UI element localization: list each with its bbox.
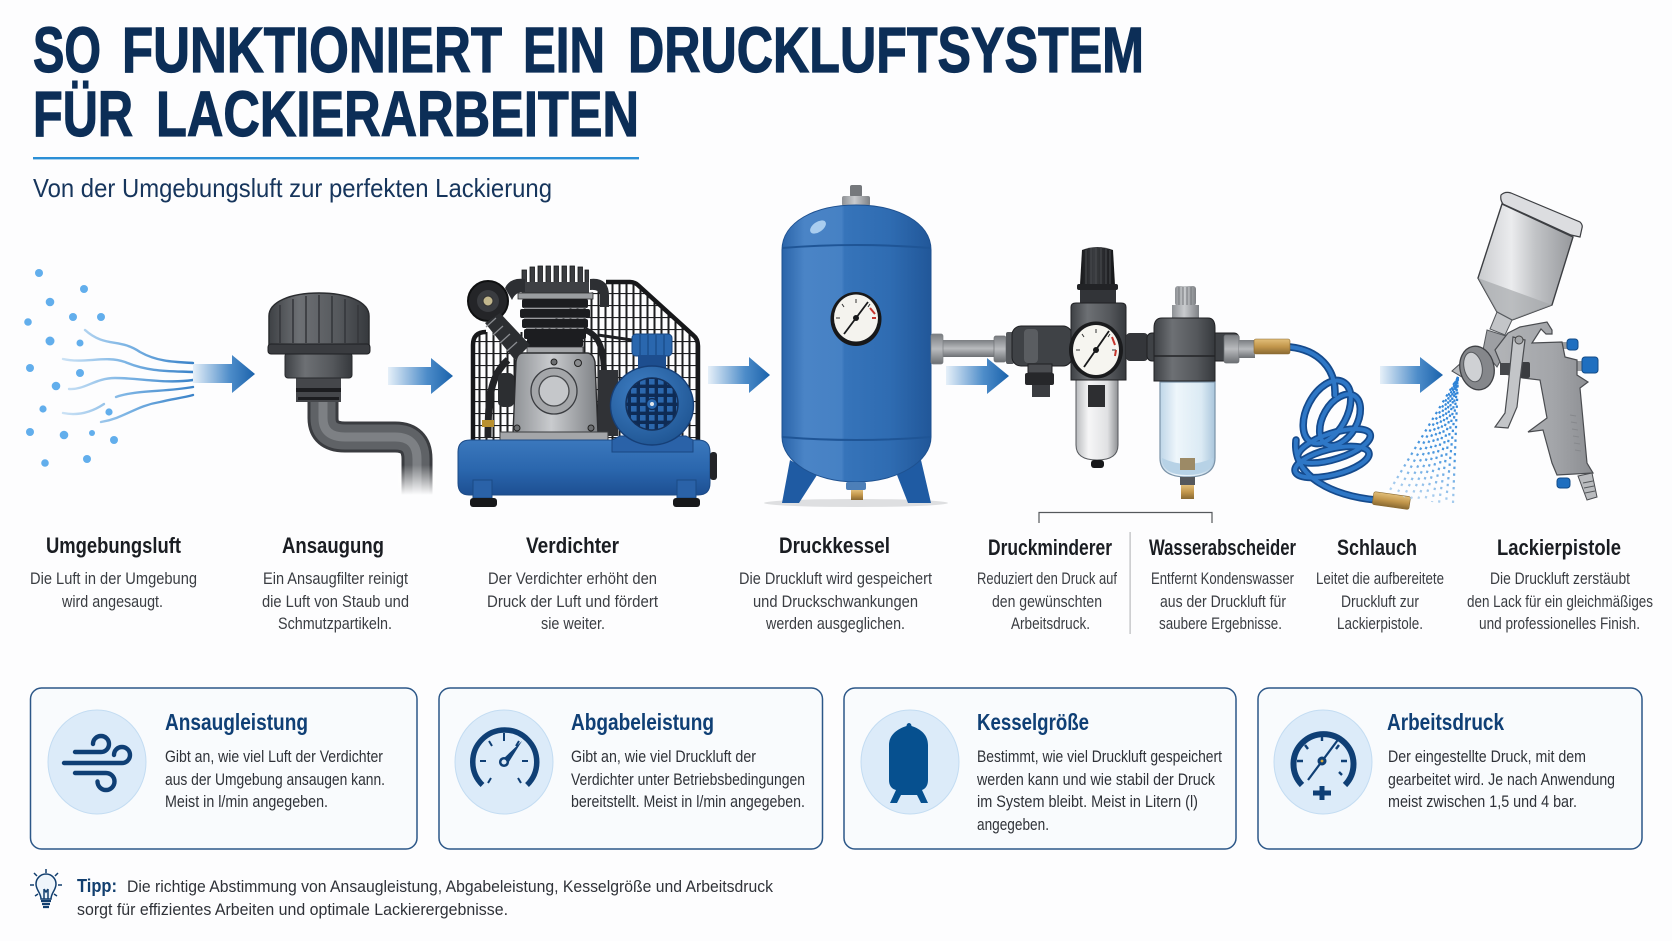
arrow 2 [388,358,453,394]
step: Ansaugung: die Luft von Staub und [262,593,409,611]
step: Wasserabscheider: Wasserabscheider [1149,535,1296,560]
panel: Ansaugleistung [30,688,417,849]
step: Ansaugung [262,533,409,633]
step: Druckkessel: Die Druckluft wird gespeichert [739,570,932,588]
step: Druckminderer: Reduziert den Druck auf [977,570,1117,588]
icon: ambient air particles and streams [24,269,193,467]
step: Ansaugung: Schmutzpartikeln. [278,615,392,633]
step: Verdichter [487,533,658,633]
step: Umgebungsluft: Die Luft in der Umgebung [30,570,197,588]
title: FUNKTIONIERT [122,14,502,86]
panel: Abgabeleistung [439,688,822,849]
step: Druckkessel: und Druckschwankungen [753,593,918,611]
panel: Abgabeleistung: Verdichter unter Betriebsbedingungen [571,771,805,789]
illustration: spray gun [1452,192,1598,500]
step: Verdichter: Der Verdichter erhöht den [488,570,657,588]
subtitle: Von der Umgebungsluft zur perfekten Lackierung [33,173,552,203]
step: Druckkessel: werden ausgeglichen. [765,615,905,633]
step: Lackierpistole: und professionelles Finish. [1479,615,1640,633]
panel: Arbeitsdruck: Arbeitsdruck [1387,709,1504,735]
tip text: Tipp: [77,876,117,896]
step: Wasserabscheider: Entfernt Kondenswasser [1151,570,1294,588]
title: FÜR [33,78,133,150]
illustration: piping to regulator [931,326,1072,397]
step: Umgebungsluft [30,533,197,611]
step: Verdichter: sie weiter. [541,615,605,633]
step: Schlauch [1316,535,1444,633]
tip text [77,876,773,919]
panel: Kesselgröße: werden kann und wie stabil der Druck [976,771,1216,789]
panel: Kesselgröße: Kesselgröße [977,709,1089,735]
illustration: intake filter [268,293,436,497]
panel: Arbeitsdruck: gearbeitet wird. Je nach Anwendung [1388,771,1615,789]
title: SO [33,14,101,86]
step: Ansaugung: Ein Ansaugfilter reinigt [263,570,408,588]
icon: light bulb [30,869,62,907]
panel: Ansaugleistung: Ansaugleistung [165,709,308,735]
panel: Arbeitsdruck: Der eingestellte Druck, mit dem [1388,748,1586,766]
step: Umgebungsluft: wird angesaugt. [61,593,163,611]
tip text: Die richtige Abstimmung von Ansaugleistung, Abgabeleistung, Kesselgröße und Arbeitsdruck [127,877,773,896]
illustration: compressor [458,266,717,507]
arrow 3 [708,357,770,393]
title: DRUCKLUFTSYSTEM [628,14,1144,86]
step: Druckkessel [739,533,932,633]
title: LACKIERARBEITEN [156,78,639,150]
icon: tank silhouette [889,723,928,803]
panel: Kesselgröße [844,688,1236,849]
icon: speedometer [473,730,537,785]
illustration: coiled hose [1254,339,1411,510]
icon: wind [64,736,130,790]
icon: pressure gauge [1294,734,1353,800]
step: Verdichter: Druck der Luft und fördert [487,593,658,611]
arrow 5 [1380,357,1443,393]
panel: Abgabeleistung: bereitstellt. Meist in l/min angegeben. [571,793,805,811]
panel: Ansaugleistung: Meist in l/min angegeben. [165,793,328,811]
illustration: water separator [1126,286,1255,499]
step: Schlauch: Leitet die aufbereitete [1316,570,1444,588]
panel: Kesselgröße: im System bleibt. Meist in Litern (l) [977,793,1198,811]
arrow 4 [946,358,1009,394]
panel: Kesselgröße: Bestimmt, wie viel Druckluft gespeichert [977,748,1222,766]
step: Druckminderer: Druckminderer [988,535,1112,560]
title [33,14,1144,150]
step: Druckminderer [977,535,1117,633]
illustration: pressure vessel [764,185,948,507]
step: Schlauch: Schlauch [1337,535,1417,560]
bracket: regulator and separator [1039,512,1212,523]
step: Wasserabscheider: aus der Druckluft für [1160,593,1286,611]
step: Umgebungsluft: Umgebungsluft [46,533,182,558]
panel: Kesselgröße: angegeben. [977,816,1049,834]
illustration: pressure regulator [1069,247,1126,468]
step: Lackierpistole: Lackierpistole [1497,535,1621,560]
panel: Ansaugleistung: aus der Umgebung ansaugen kann. [165,771,385,789]
panel: Abgabeleistung: Abgabeleistung [571,709,714,735]
panel: Ansaugleistung: Gibt an, wie viel Luft der Verdichter [165,748,383,766]
step: Lackierpistole [1467,535,1653,633]
step: Lackierpistole: Die Druckluft zerstäubt [1490,570,1630,588]
step: Schlauch: Lackierpistole. [1337,615,1423,633]
step: Druckminderer: Arbeitsdruck. [1011,615,1090,633]
step: Wasserabscheider: saubere Ergebnisse. [1159,615,1282,633]
illustration: paint spray [1390,377,1458,503]
panel: Abgabeleistung: Gibt an, wie viel Druckluft der [571,748,756,766]
step: Ansaugung: Ansaugung [282,533,384,558]
arrow 1 [193,355,255,393]
step: Wasserabscheider [1149,535,1296,633]
step: Schlauch: Druckluft zur [1341,593,1419,611]
panel: Arbeitsdruck [1258,688,1642,849]
title: EIN [523,14,605,86]
step: Verdichter: Verdichter [526,533,619,558]
step: Druckminderer: den gewünschten [992,593,1102,611]
tip text: sorgt für effizientes Arbeiten und optimale Lackierergebnisse. [77,900,508,919]
step: Druckkessel: Druckkessel [779,533,890,558]
panel: Arbeitsdruck: meist zwischen 1,5 und 4 bar. [1388,793,1577,811]
